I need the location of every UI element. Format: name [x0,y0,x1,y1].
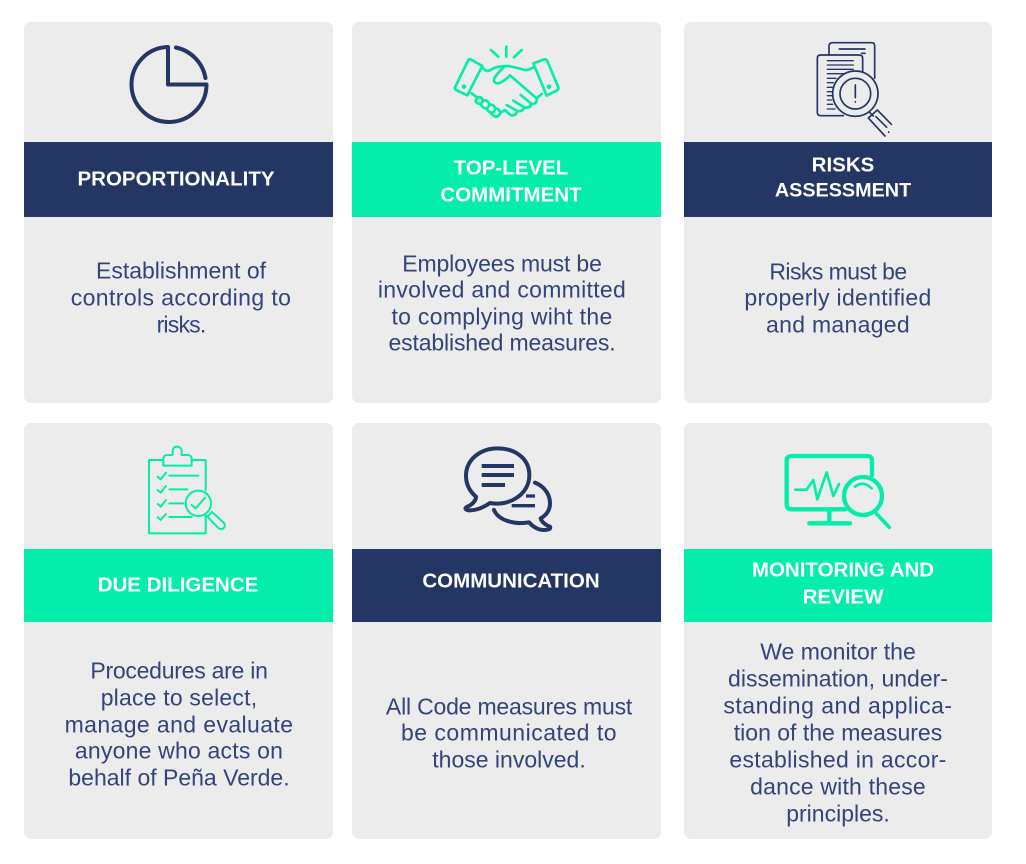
text: communication description: those involved. [432,746,586,772]
heading: risks assessment: RISKS [812,154,874,176]
panel: monitoring and review [684,423,992,839]
text: due diligence description: behalf of Peña Verde. [68,764,290,790]
icon: pie chart [130,45,208,124]
heading: monitoring and review: REVIEW [803,586,883,608]
heading: top-level commitment: TOP-LEVEL [454,156,568,180]
heading: monitoring and review: MONITORING AND [752,558,934,582]
text: top-level commitment description: involved and committed [378,276,626,302]
text: top-level commitment description: established measures. [389,330,615,356]
text: communication description: be communicated to [401,720,617,746]
text: due diligence description: Procedures are in [90,658,268,684]
text: due diligence description: anyone who acts on [75,738,283,764]
heading: monitoring and review [752,558,934,608]
icon: speech bubbles [463,446,552,532]
text: monitoring and review description: We monitor the [760,638,916,664]
text: monitoring and review description: principles. [786,800,890,826]
text: monitoring and review description: established in accor- [729,746,947,772]
text: risks assessment description: and managed [766,312,910,338]
text: risks assessment description: Risks must be [769,258,907,284]
text: monitoring and review description: standing and applica- [723,692,953,718]
heading band: top-level commitment [352,142,661,217]
heading: proportionality: PROPORTIONALITY [77,168,275,190]
heading: top-level commitment: COMMITMENT [440,184,582,206]
heading: top-level commitment [440,156,582,206]
text: proportionality description: risks. [157,312,205,338]
text: top-level commitment description: Employees must be [402,250,602,276]
text: top-level commitment description [378,250,626,356]
text: risks assessment description [744,258,932,338]
text: monitoring and review description: dance with these [750,774,926,800]
text: monitoring and review description [723,638,953,826]
text: monitoring and review description: dissemination, under- [728,666,948,692]
text: due diligence description [65,658,293,790]
text: risks assessment description: properly identified [744,284,932,310]
heading: communication: COMMUNICATION [422,570,600,592]
heading: risks assessment [775,154,911,202]
panel: due diligence [24,423,333,839]
heading band: monitoring and review [684,549,992,622]
text: top-level commitment description: to complying wiht the [391,304,613,330]
heading band: risks assessment [684,142,992,217]
heading band: communication [352,549,661,622]
icon: handshake [453,45,560,118]
panel: risks assessment [684,22,992,403]
icon: clipboard and magnifier [148,446,226,534]
text: communication description [386,694,632,772]
text: due diligence description: place to select, [101,684,257,710]
heading band: proportionality [24,142,333,217]
text: monitoring and review description: tion of the measures [734,720,942,746]
panel: top-level commitment [352,22,661,403]
text: proportionality description: controls according to [71,284,291,310]
panel: proportionality [24,22,333,403]
text: proportionality description: Establishment of [96,258,266,284]
heading: risks assessment: ASSESSMENT [775,180,911,202]
heading band: due diligence [24,549,333,622]
text: proportionality description [71,258,291,338]
heading: due diligence: DUE DILIGENCE [98,574,258,596]
text: communication description: All Code measures must [386,694,632,720]
panel: communication [352,423,661,839]
text: due diligence description: manage and evaluate [65,712,293,738]
icon: monitor and magnifier [784,454,892,530]
icon: documents and magnifier [816,42,892,137]
